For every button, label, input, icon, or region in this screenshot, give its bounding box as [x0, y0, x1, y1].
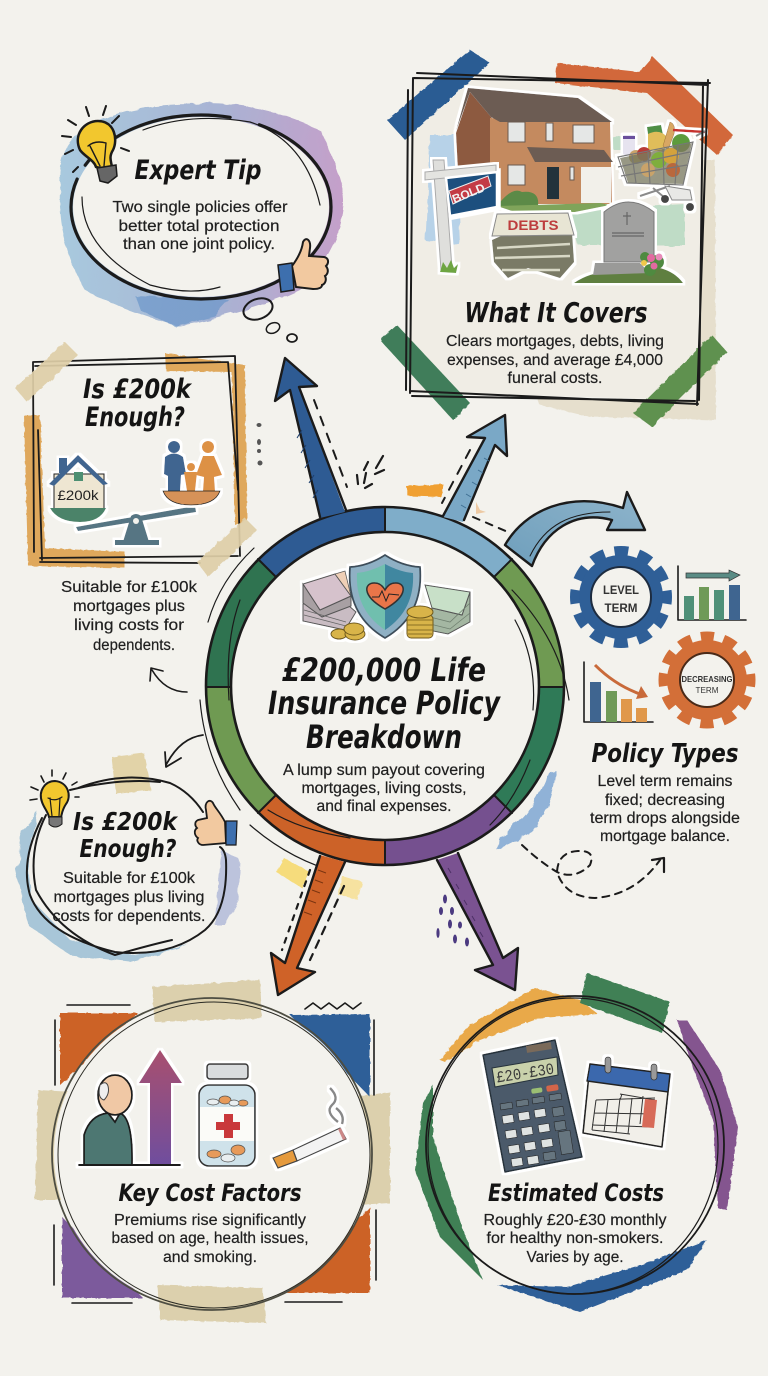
icon: debts cash stack: DEBTS [508, 218, 558, 233]
body text: Suitable for £100k [61, 579, 197, 596]
icon: debts cash stack [492, 213, 574, 278]
body text: mortgages plus [73, 598, 185, 615]
body text: costs for dependents. [52, 908, 206, 925]
heading: Enough? [85, 402, 185, 433]
family [163, 441, 222, 505]
icon: light bulb [62, 106, 129, 183]
body text: expenses, and average £4,000 [447, 352, 663, 369]
icon: house [456, 88, 613, 212]
icon: gravestone [574, 202, 683, 283]
tape [112, 753, 151, 794]
icon: calculator: £20-£30 [495, 1061, 555, 1087]
body text: Level term remains [598, 773, 733, 790]
icon: shopping cart [618, 122, 705, 211]
bar chart: decreasing [584, 662, 653, 722]
title: Insurance Policy [268, 684, 501, 722]
heading [73, 807, 178, 863]
panel: what it covers [380, 50, 733, 427]
washes [16, 812, 240, 962]
body text: Roughly £20-£30 monthly [484, 1212, 667, 1229]
subtitle [283, 762, 485, 815]
panel: is 200k enough (top) [15, 342, 257, 654]
body text [61, 579, 197, 654]
heading: Expert Tip [134, 155, 262, 186]
icon: calculator [483, 1040, 582, 1172]
body text [484, 1212, 667, 1266]
heading [83, 374, 193, 433]
title [268, 651, 501, 756]
tapes [15, 342, 257, 577]
icon: decreasing term gear [664, 637, 750, 723]
icon: calendar [583, 1057, 670, 1147]
panel: estimated costs [415, 973, 738, 1312]
icon: level term gear [576, 552, 666, 642]
icon: money and shield [303, 555, 470, 640]
sketch frame [33, 356, 240, 563]
body text [52, 870, 206, 925]
icon: sold sign: BOLD [450, 180, 487, 206]
house: £200k [58, 488, 99, 503]
corner triangles [60, 1013, 370, 1298]
body text: Suitable for £100k [63, 870, 195, 887]
icon: cigarette [273, 1088, 346, 1168]
house [49, 455, 108, 522]
body text [112, 199, 288, 253]
arrow: curved to policy types [505, 492, 645, 566]
heading: Key Cost Factors [118, 1179, 302, 1207]
icon: thumbs up [195, 801, 237, 845]
body text: dependents. [93, 637, 175, 654]
hand drawn loop [27, 778, 226, 955]
pale washes [425, 135, 685, 245]
bar chart: level [678, 566, 746, 620]
body text: Premiums rise significantly [114, 1212, 306, 1229]
arrow: light blue up-right [442, 415, 508, 532]
body text: Clears mortgages, debts, living [446, 333, 664, 350]
torn paper backing [537, 160, 716, 420]
title: £200,000 Life [282, 651, 486, 689]
dashed looping arrow [522, 845, 664, 898]
washes [415, 973, 738, 1312]
body text: based on age, health issues, [112, 1230, 308, 1247]
speech bubble [73, 117, 329, 297]
panel: key cost factors [35, 980, 390, 1323]
arrow: blue up-left [275, 358, 347, 518]
heading: Is £200k [73, 807, 178, 836]
body text: fixed; decreasing [605, 792, 725, 809]
subtitle: A lump sum payout covering [283, 762, 485, 779]
hub: central ring [200, 506, 569, 873]
body text: than one joint policy. [123, 236, 275, 253]
icon: sold sign [425, 160, 497, 273]
icon: elderly person with rising arrow [79, 1050, 182, 1165]
sketch frame [406, 73, 710, 405]
body text [446, 333, 664, 387]
body text: better total protection [118, 218, 280, 235]
title: Breakdown [306, 718, 462, 756]
panel: policy types [576, 552, 750, 845]
heading: What It Covers [464, 296, 648, 329]
icon: light bulb [30, 770, 79, 827]
body text: and smoking. [163, 1249, 257, 1266]
icon: scale with house and family [49, 441, 222, 545]
body text [112, 1212, 308, 1266]
body text: term drops alongside [590, 810, 740, 827]
watercolour wash [59, 104, 344, 326]
subtitle: and final expenses. [316, 798, 452, 815]
body text: mortgages plus living [54, 889, 204, 906]
subtitle: mortgages, living costs, [302, 780, 466, 797]
decorative marks around the hub [256, 423, 556, 946]
hand drawn circle [426, 996, 724, 1294]
body text: mortgage balance. [600, 828, 730, 845]
coloured tapes [380, 50, 733, 427]
icon: pill bottle [199, 1064, 255, 1166]
icon: decreasing term gear: TERM [696, 685, 718, 695]
icon: level term gear: TERM [604, 601, 638, 615]
panel: expert tip [59, 104, 344, 342]
sketch marks [52, 998, 376, 1310]
thought bubbles [240, 294, 297, 342]
body text: Varies by age. [526, 1249, 624, 1266]
arrow: purple down-right [437, 853, 518, 990]
body text: living costs for [74, 617, 184, 634]
small curved arrow to lower callout [165, 735, 203, 767]
heading: Enough? [80, 834, 176, 863]
body text [590, 773, 740, 845]
heading: Estimated Costs [488, 1179, 664, 1207]
arrow: orange down-left [271, 855, 345, 995]
orange washes [24, 353, 247, 568]
hub content [268, 555, 501, 815]
body text: for healthy non-smokers. [486, 1230, 664, 1247]
icon: thumbs up [278, 239, 328, 292]
heading: Policy Types [592, 739, 738, 769]
panel: is 200k enough (callout) [16, 753, 240, 962]
body text: funeral costs. [508, 370, 602, 387]
tapes [35, 1090, 390, 1205]
icon: level term gear: LEVEL [603, 583, 639, 597]
small curved arrow to top text [150, 668, 187, 692]
ring segments [219, 520, 551, 852]
icon: decreasing term gear: DECREASING [682, 674, 733, 684]
heading: Is £200k [83, 374, 193, 405]
body text: Two single policies offer [112, 199, 288, 216]
